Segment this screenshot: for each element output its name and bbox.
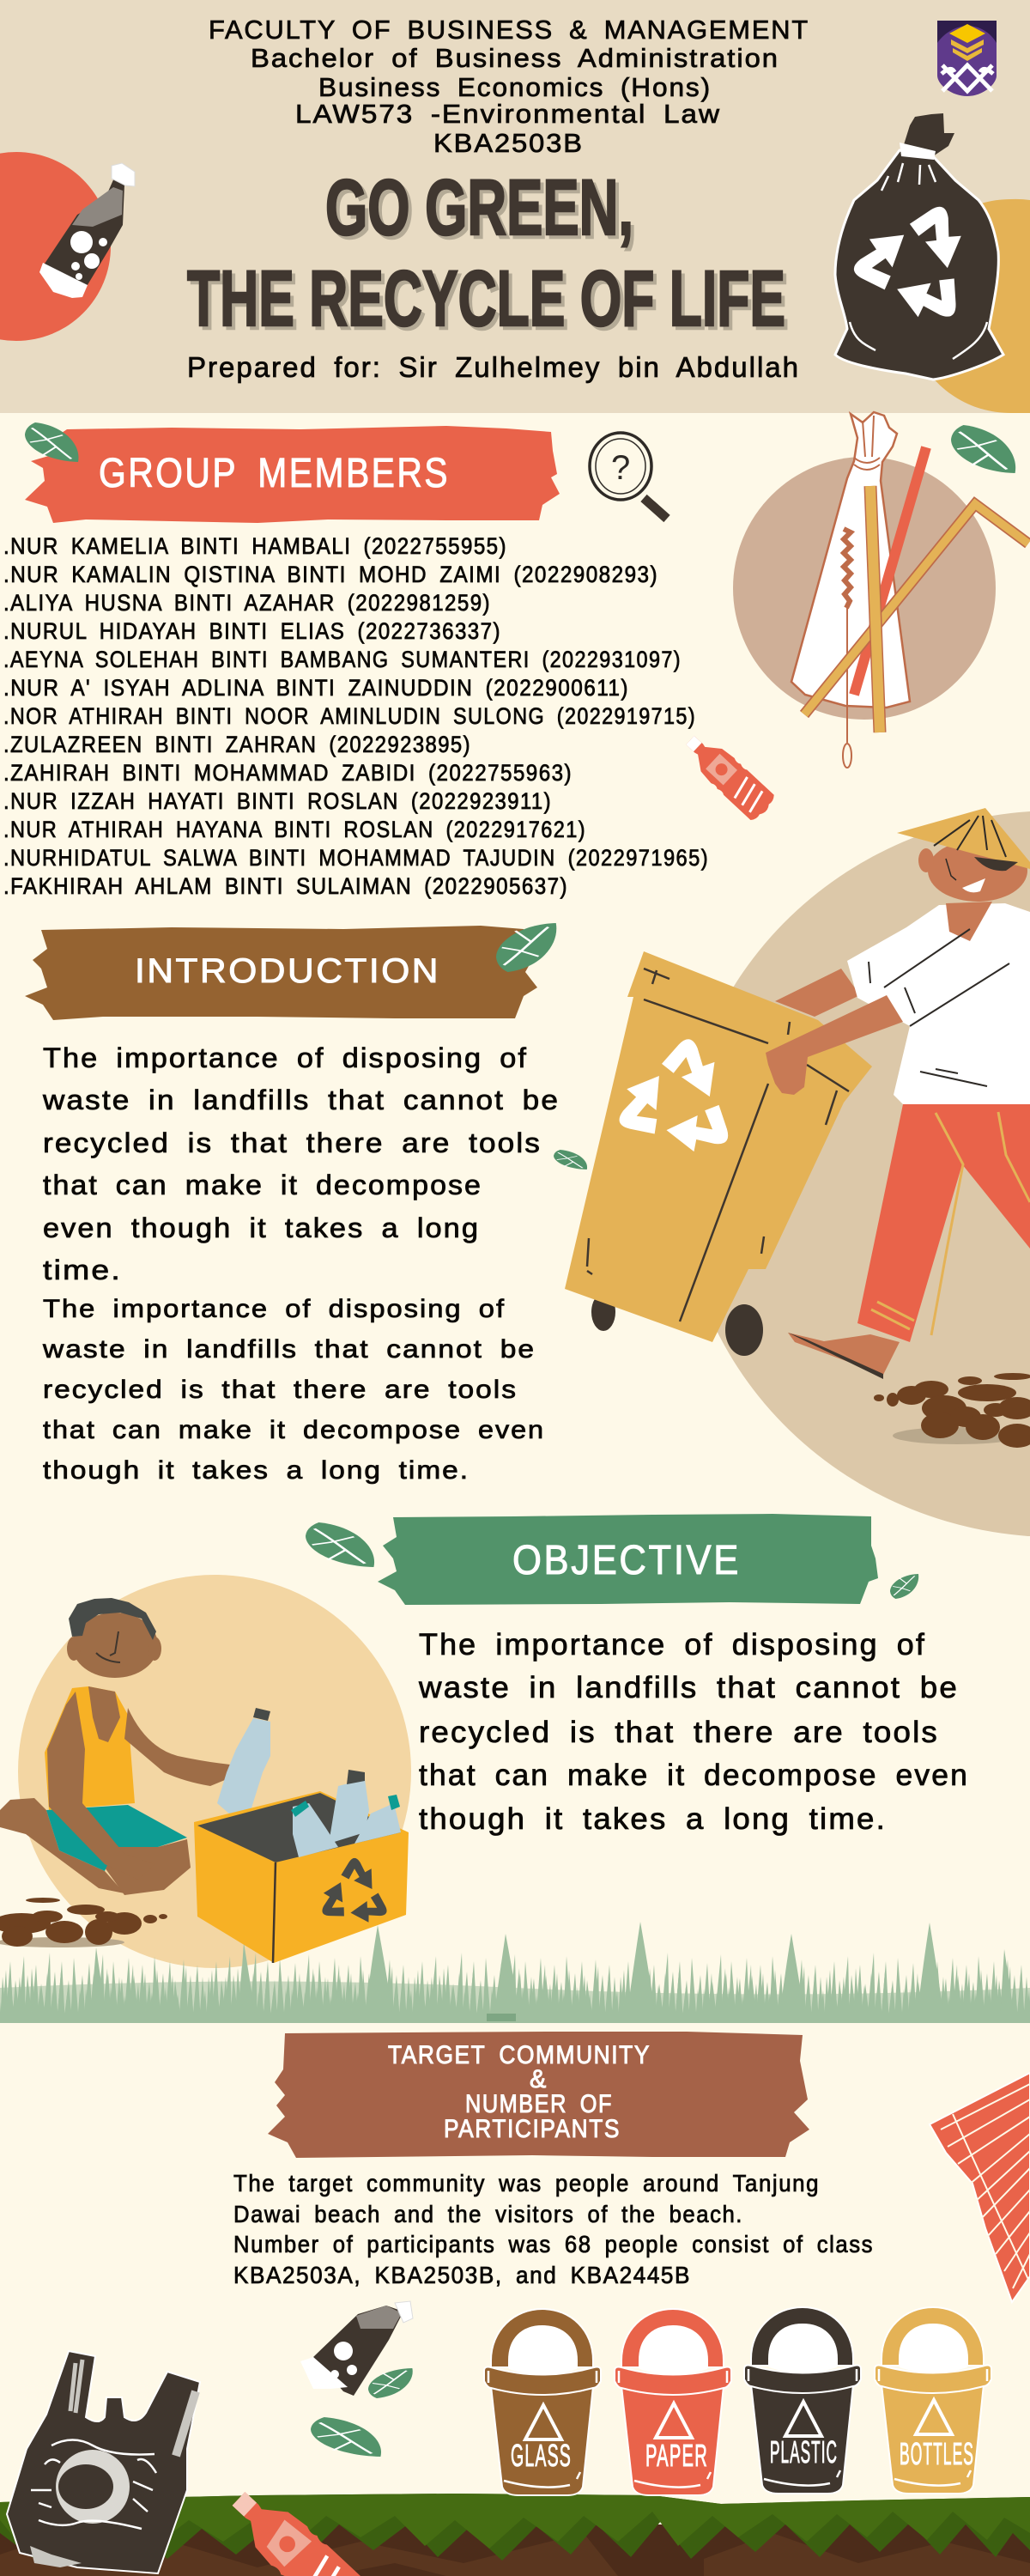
recycling bin: paper bbox=[615, 2309, 731, 2495]
icon: leaf bbox=[306, 1522, 374, 1567]
objective text: recycled is that there are tools bbox=[419, 1716, 939, 1749]
heading: faculty block bbox=[209, 15, 809, 158]
heading: faculty block: Bachelor of Business Administration bbox=[251, 43, 779, 73]
member list: .AEYNA SOLEHAH BINTI BAMBANG SUMANTERI (2022931097) bbox=[3, 647, 682, 672]
introduction text bbox=[42, 1042, 560, 1485]
header band bbox=[0, 0, 1030, 413]
panel: introduction bbox=[25, 808, 1030, 1537]
panel: target community bbox=[0, 2032, 1030, 2576]
introduction text: recycled is that there are tools bbox=[43, 1376, 518, 1404]
member list: .NUR KAMELIA BINTI HAMBALI (2022755955) bbox=[3, 533, 507, 559]
icon: magnifying glass bbox=[590, 433, 667, 519]
member list: .ALIYA HUSNA BINTI AZAHAR (2022981259) bbox=[3, 590, 491, 616]
icon: leaf bbox=[368, 2368, 413, 2398]
member list: .NURHIDATUL SALWA BINTI MOHAMMAD TAJUDIN (2022971965) bbox=[3, 845, 709, 871]
heading: faculty block: FACULTY OF BUSINESS & MANAGEMENT bbox=[209, 15, 809, 45]
target community text: Number of participants was 68 people consist of class bbox=[233, 2231, 874, 2257]
recycling bin: glass: GLASS bbox=[511, 2438, 572, 2473]
target community text: Dawai beach and the visitors of the beach. bbox=[233, 2201, 743, 2227]
objective banner bbox=[378, 1514, 878, 1605]
introduction text: recycled is that there are tools bbox=[43, 1127, 542, 1158]
icon: small red bottle bbox=[678, 727, 778, 823]
target community banner: & bbox=[530, 2065, 548, 2093]
target community banner: TARGET COMMUNITY bbox=[388, 2041, 651, 2069]
recycling bin: paper: PAPER bbox=[645, 2438, 708, 2473]
recycling bin: glass bbox=[484, 2309, 601, 2495]
introduction text: time. bbox=[43, 1255, 122, 1285]
illustration: bottles and recycling box bbox=[194, 1708, 409, 1963]
icon: leaf right bbox=[951, 425, 1015, 473]
illustration: ground with grass bbox=[0, 2494, 1030, 2576]
peach circle bbox=[18, 1575, 411, 1968]
target community text bbox=[233, 2170, 874, 2288]
icon: leaf bbox=[311, 2417, 381, 2457]
yellow circle bbox=[906, 199, 1030, 413]
member list: .FAKHIRAH AHLAM BINTI SULAIMAN (2022905637) bbox=[3, 873, 568, 899]
panel: group members bbox=[3, 412, 1028, 899]
objective text: waste in landfills that cannot be bbox=[418, 1671, 959, 1704]
icon: small leaf bbox=[890, 1574, 918, 1599]
member list: .ZAHIRAH BINTI MOHAMMAD ZABIDI (2022755963) bbox=[3, 760, 573, 786]
heading: faculty block: Business Economics (Hons) bbox=[318, 72, 712, 102]
illustration: cloth bag and straws bbox=[733, 412, 1028, 768]
panel: header bbox=[0, 0, 1030, 413]
red circle bbox=[0, 152, 111, 341]
recycling bin: plastic: PLASTIC bbox=[770, 2434, 838, 2470]
objective banner: OBJECTIVE bbox=[512, 1538, 741, 1583]
member list: .NOR ATHIRAH BINTI NOOR AMINLUDIN SULONG (2022919715) bbox=[3, 703, 696, 729]
objective text: though it takes a long time. bbox=[419, 1802, 887, 1836]
title bbox=[187, 164, 789, 346]
illustration: boy bbox=[0, 1598, 239, 1895]
member list: .ZULAZREEN BINTI ZAHRAN (2022923895) bbox=[3, 732, 471, 757]
introduction text: that can make it decompose bbox=[43, 1170, 482, 1200]
target community banner bbox=[268, 2032, 809, 2158]
objective text bbox=[418, 1628, 969, 1836]
target community text: The target community was people around Tanjung bbox=[233, 2170, 820, 2196]
prepared for line: Prepared for: Sir Zulhelmey bin Abdullah bbox=[187, 351, 800, 383]
icon: large red bottle bbox=[221, 2479, 374, 2576]
group members banner bbox=[25, 426, 560, 523]
heading: faculty block: LAW573 -Environmental Law bbox=[295, 99, 721, 129]
member list bbox=[3, 533, 709, 899]
target community banner: PARTICIPANTS bbox=[444, 2115, 621, 2143]
icon: UiTM logo bbox=[937, 21, 997, 96]
recycling bin: bottles bbox=[875, 2307, 991, 2494]
introduction text: The importance of disposing of bbox=[43, 1295, 506, 1323]
introduction banner: INTRODUCTION bbox=[135, 952, 440, 990]
icon: dark bottle bbox=[39, 163, 135, 298]
introduction text: that can make it decompose even bbox=[43, 1416, 545, 1444]
objective text: that can make it decompose even bbox=[419, 1759, 969, 1792]
illustration: worker bbox=[775, 808, 1030, 1379]
heading: faculty block: KBA2503B bbox=[433, 128, 584, 158]
group members banner: GROUP MEMBERS bbox=[99, 451, 450, 496]
introduction text: though it takes a long time. bbox=[43, 1456, 470, 1485]
title: GO GREEN, bbox=[329, 167, 637, 255]
icon: leaf bbox=[25, 422, 78, 462]
introduction banner bbox=[25, 926, 537, 1020]
introduction text: The importance of disposing of bbox=[43, 1042, 528, 1073]
illustration: soil pile left bbox=[0, 1898, 167, 1947]
member list: .NUR A' ISYAH ADLINA BINTI ZAINUDDIN (2022900611) bbox=[3, 675, 629, 701]
icon: plastic bag bbox=[7, 2351, 200, 2573]
recycling bin: plastic bbox=[744, 2307, 861, 2494]
icon: small leaf bbox=[554, 1150, 587, 1170]
member list: .NUR KAMALIN QISTINA BINTI MOHD ZAIMI (2022908293) bbox=[3, 562, 658, 587]
illustration: recycling bin bbox=[565, 951, 903, 1356]
illustration: large tan circle bbox=[680, 811, 1030, 1537]
icon: dark bottle small bbox=[300, 2301, 413, 2396]
icon: leaf bbox=[496, 923, 556, 972]
icon: trash bag with recycle symbol bbox=[829, 113, 1003, 380]
grass strip bbox=[0, 1922, 1030, 2023]
panel: objective bbox=[0, 1514, 1030, 2023]
target community banner: NUMBER OF bbox=[465, 2090, 613, 2118]
objective text: The importance of disposing of bbox=[419, 1628, 926, 1662]
introduction text: even though it takes a long bbox=[43, 1212, 480, 1243]
illustration: soil pile right bbox=[874, 1373, 1030, 1448]
icon: magnifying glass: ? bbox=[611, 449, 630, 487]
member list: .NURUL HIDAYAH BINTI ELIAS (2022736337) bbox=[3, 618, 501, 644]
member list: .NUR IZZAH HAYATI BINTI ROSLAN (2022923911) bbox=[3, 788, 552, 814]
title: GO GREEN, bbox=[325, 164, 633, 252]
target community text: KBA2503A, KBA2503B, and KBA2445B bbox=[233, 2262, 691, 2288]
introduction text: waste in landfills that cannot be bbox=[42, 1335, 536, 1364]
introduction text: waste in landfills that cannot be bbox=[42, 1084, 560, 1115]
member list: .NUR ATHIRAH HAYANA BINTI ROSLAN (2022917621) bbox=[3, 817, 586, 842]
illustration: red striped paper bbox=[930, 2073, 1030, 2302]
